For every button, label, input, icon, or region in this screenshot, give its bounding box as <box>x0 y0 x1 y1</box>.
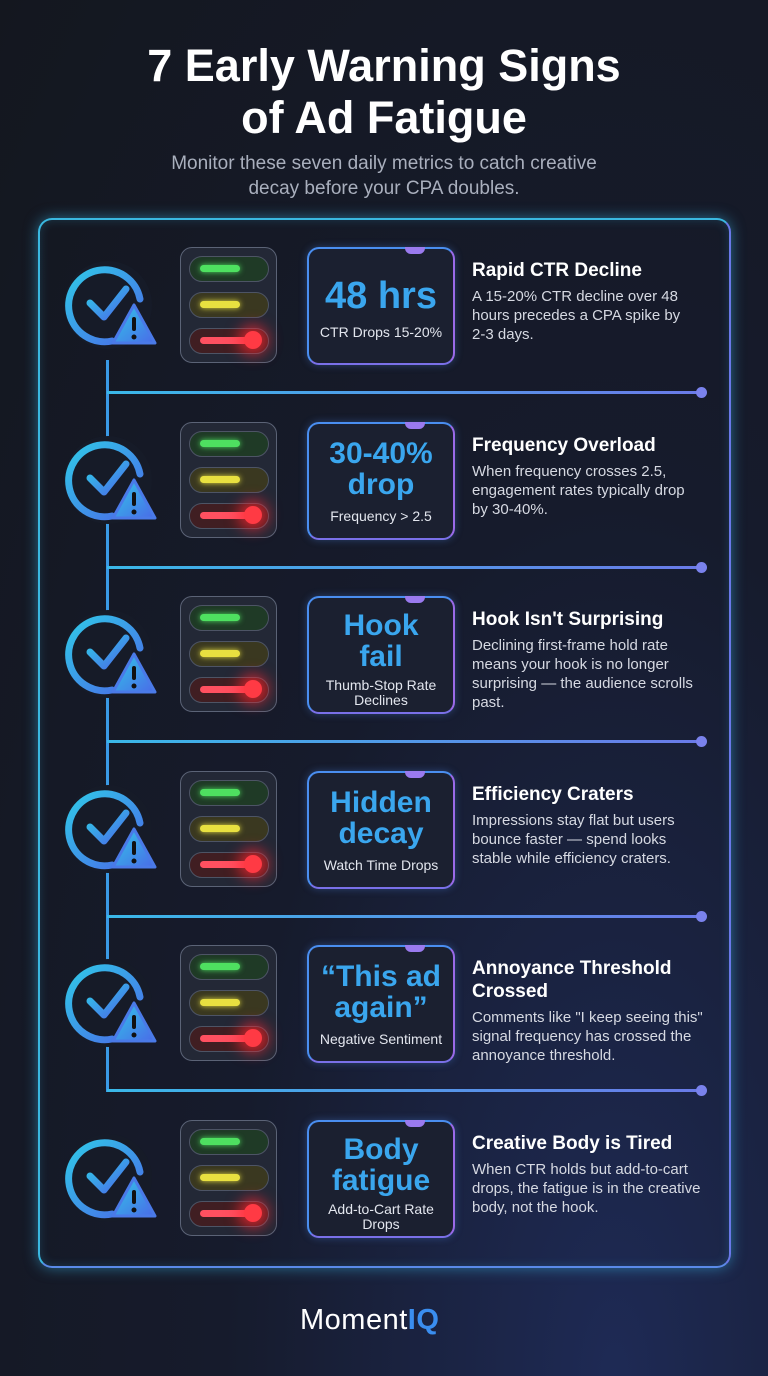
stat card: Drops <box>362 1216 400 1232</box>
stat card: CTR Drops 15-20% <box>320 324 442 340</box>
icon: check with warning <box>65 1139 157 1218</box>
stat card: Negative Sentiment <box>320 1031 442 1047</box>
text: A 15-20% CTR decline over 48 hours precedes a CPA spike by 2-3 days. <box>472 288 680 343</box>
text <box>472 1133 700 1216</box>
stat card: 48 hrs <box>325 275 437 317</box>
row 4 <box>65 766 707 922</box>
row 2 <box>65 418 707 573</box>
stat card: Watch Time Drops <box>324 857 438 873</box>
traffic light panel <box>180 1120 277 1236</box>
stat card: fatigue <box>332 1164 430 1197</box>
traffic light panel <box>180 247 277 363</box>
title <box>147 40 621 143</box>
stat card <box>307 422 455 540</box>
stat card: Add-to-Cart Rate <box>328 1201 434 1217</box>
main frame <box>38 218 731 1268</box>
text: Hook Isn't Surprising <box>472 609 663 630</box>
stat card: “This ad <box>321 960 441 993</box>
stat card: Thumb-Stop Rate <box>326 677 436 693</box>
text: Comments like "I keep seeing this" signal frequency has crossed the annoyance threshold. <box>472 1009 703 1064</box>
row 6 <box>65 1116 700 1242</box>
icon: check with warning <box>65 610 157 698</box>
icon: check with warning <box>65 959 157 1047</box>
traffic light panel <box>180 771 277 887</box>
text <box>472 435 685 518</box>
stat card <box>307 771 455 889</box>
stat card: again” <box>334 991 428 1024</box>
row 1 <box>65 242 707 398</box>
text: Impressions stay flat but users bounce faster — spend looks stable while efficiency craters. <box>472 812 675 867</box>
traffic light panel <box>180 945 277 1061</box>
text: Declining first-frame hold rate means your hook is no longer surprising — the audience scrolls past. <box>472 637 693 711</box>
text <box>472 260 680 343</box>
text: Frequency Overload <box>472 435 656 456</box>
stat card: Declines <box>354 692 408 708</box>
icon: check with warning <box>65 266 157 346</box>
traffic light panel <box>180 422 277 538</box>
logo: MomentIQ <box>300 1304 439 1336</box>
timeline line <box>106 360 109 1092</box>
stat card <box>307 945 455 1063</box>
stat card <box>307 596 455 714</box>
stat card: Body <box>344 1133 418 1166</box>
stat card: 30-40% <box>329 437 433 470</box>
text <box>472 958 703 1064</box>
subtitle: Monitor these seven daily metrics to catch creative <box>171 153 597 174</box>
stat card: Hidden <box>330 786 432 819</box>
traffic light panel <box>180 596 277 712</box>
text: Efficiency Craters <box>472 784 634 805</box>
text: When CTR holds but add-to-cart drops, the fatigue is in the creative body, not the hook. <box>472 1161 700 1216</box>
text: When frequency crosses 2.5, engagement rates typically drop by 30-40%. <box>472 463 685 518</box>
stat card <box>307 247 455 365</box>
text: Annoyance Threshold Crossed <box>472 958 672 1002</box>
title: of Ad Fatigue <box>241 92 527 143</box>
icon: check with warning <box>65 436 157 524</box>
stat card: Frequency > 2.5 <box>330 508 432 524</box>
stat card: drop <box>348 468 414 501</box>
row 5 <box>65 941 707 1096</box>
stat card: fail <box>359 640 403 673</box>
row 3 <box>65 592 707 747</box>
text: Creative Body is Tired <box>472 1133 672 1154</box>
subtitle: decay before your CPA doubles. <box>248 178 520 199</box>
stat card: Hook <box>344 609 418 642</box>
title: 7 Early Warning Signs <box>147 40 621 91</box>
text <box>472 784 675 867</box>
stat card <box>307 1120 455 1238</box>
stat card: decay <box>338 817 424 850</box>
subtitle <box>171 153 597 199</box>
text: Rapid CTR Decline <box>472 260 642 281</box>
icon: check with warning <box>65 785 157 873</box>
